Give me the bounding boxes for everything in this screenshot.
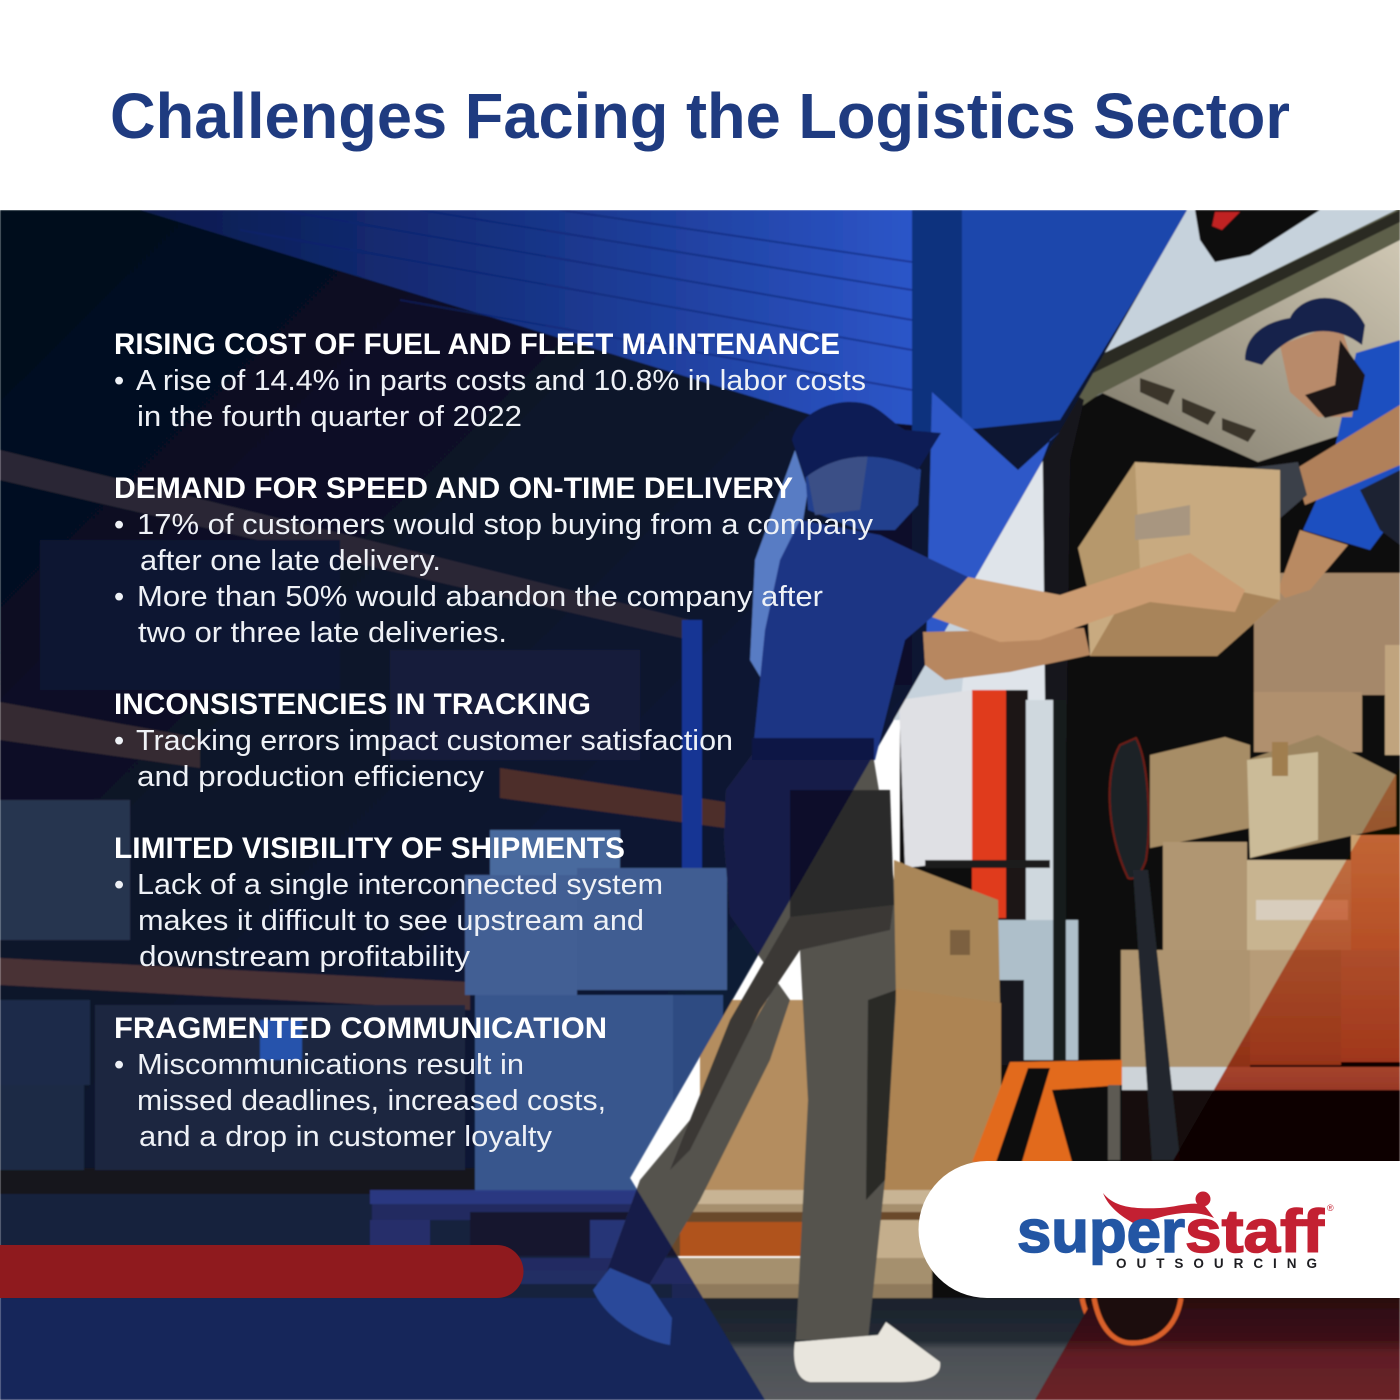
- section: demand for speed: [114, 472, 874, 649]
- worker in the van: [1244, 297, 1400, 598]
- stacked boxes by the van door: [700, 860, 1001, 1205]
- bullet text: two or three late deliveries: [114, 581, 823, 649]
- bullet text: parts and labor costs: in the fourth quarter of 2022: [137, 401, 522, 433]
- bullet text: tracking errors: [114, 725, 733, 793]
- cap: [792, 402, 941, 478]
- bullet text: parts and labor costs: •: [114, 365, 124, 397]
- logo figure head: [1196, 1192, 1210, 1206]
- bullet text: tracking errors: and production efficiency: [137, 761, 485, 793]
- logo: SuperStaff Outsourcing: [1017, 1192, 1334, 1271]
- section: fragmented communication: [114, 1012, 607, 1153]
- pallet jack: [972, 738, 1180, 1162]
- section: limited visibility: [114, 832, 663, 973]
- bullet text: one late delivery: [114, 509, 874, 577]
- shoes: [794, 1322, 940, 1382]
- white logo pill: [918, 1161, 1400, 1298]
- large blue boxes: [465, 830, 727, 1192]
- cargo boxes in the van: [1121, 573, 1400, 1165]
- van door and taillight: [899, 690, 1078, 1065]
- bullet text: miscommunications: and a drop in customer loyalty: [139, 1121, 553, 1153]
- asphalt floor: [702, 1297, 1085, 1400]
- bullet text: miscommunications: •: [114, 1049, 124, 1081]
- bullet text: single interconnected system: makes it difficult to see upstream and: [138, 905, 644, 937]
- orange jack wheel: [1078, 1298, 1092, 1316]
- left warehouse photo: blue tinted region: [0, 210, 1200, 1400]
- logo word staff: staff: [1185, 1198, 1325, 1265]
- ponytail: [750, 450, 808, 693]
- title: Challenges Facing the Logistics Sector: [110, 80, 1290, 152]
- held cardboard box: [1078, 462, 1280, 656]
- section: rising cost of fuel: [114, 328, 866, 433]
- hair and face: [804, 456, 922, 532]
- heading: limited visibility: LIMITED VISIBILITY OF SHIPMENTS: [114, 832, 625, 865]
- red tinted floor: [1035, 1298, 1400, 1400]
- delivery worker: woman handing the box: [593, 402, 1245, 1382]
- bullet text: parts and labor costs: A rise of 14.4% in parts costs and 10.8% in labor costs: [136, 365, 866, 397]
- bullet text: single interconnected system: Lack of a single interconnected system: [137, 869, 663, 901]
- bullet text: tracking errors: Tracking errors impact customer satisfaction: [136, 725, 733, 757]
- bullet text: two or three late deliveries: •: [114, 581, 124, 613]
- heading: rising cost: RISING COST OF FUEL AND FLEET MAINTENANCE: [114, 328, 840, 361]
- pallet under the boxes: [370, 1190, 932, 1298]
- van and interior: right part of the photo: [892, 210, 1400, 1300]
- red diagonal overlay on the right: [1070, 768, 1400, 1341]
- bullet text: two or three late deliveries: More than 50% would abandon the company after: [137, 581, 823, 613]
- heading: inconsistencies in tracking: INCONSISTENCIES IN TRACKING: [114, 688, 591, 721]
- warehouse shelving beams: [0, 450, 725, 1194]
- heading: fragmented communication: FRAGMENTED COMMUNICATION: [114, 1012, 607, 1045]
- bullet text: one late delivery: •: [114, 509, 124, 541]
- bullet text: miscommunications: missed deadlines, increased costs,: [137, 1085, 606, 1117]
- bullet text: miscommunications: Miscommunications result in: [137, 1049, 524, 1081]
- trousers: [636, 755, 897, 1340]
- bullet text: tracking errors: •: [114, 725, 124, 757]
- woman's arms: [923, 553, 1245, 680]
- bullet text: single interconnected system: downstream profitability: [139, 941, 471, 973]
- red accent bar: [0, 1245, 524, 1298]
- shirt: [752, 520, 968, 760]
- registered mark: ®: [1327, 1203, 1334, 1213]
- bullet text: one late delivery: after one late delivery.: [140, 545, 441, 577]
- heading: demand for speed: DEMAND FOR SPEED AND ON-TIME DELIVERY: [114, 472, 793, 505]
- warehouse floor: [0, 1194, 700, 1298]
- bullet text: single interconnected system: •: [114, 869, 124, 901]
- bullet text: miscommunications: [114, 1049, 606, 1153]
- bullet text: parts and labor costs: [114, 365, 866, 433]
- section: inconsistencies in tracking: [114, 688, 733, 793]
- logo outsourcing tagline: OUTSOURCING: [1116, 1256, 1317, 1271]
- bullet text: two or three late deliveries: two or three late deliveries.: [138, 617, 507, 649]
- tinted pallet in the blue region: [368, 1188, 702, 1298]
- wheel over red floor: [1094, 1298, 1181, 1343]
- white header background: [0, 0, 1400, 210]
- logo swoosh: [1103, 1193, 1214, 1224]
- bullet text: one late delivery: 17% of customers would stop buying from a company: [137, 509, 874, 541]
- warehouse boxes in shadow: [0, 540, 640, 1170]
- bullet text: single interconnected system: [114, 869, 663, 973]
- logo word super: super: [1017, 1198, 1185, 1265]
